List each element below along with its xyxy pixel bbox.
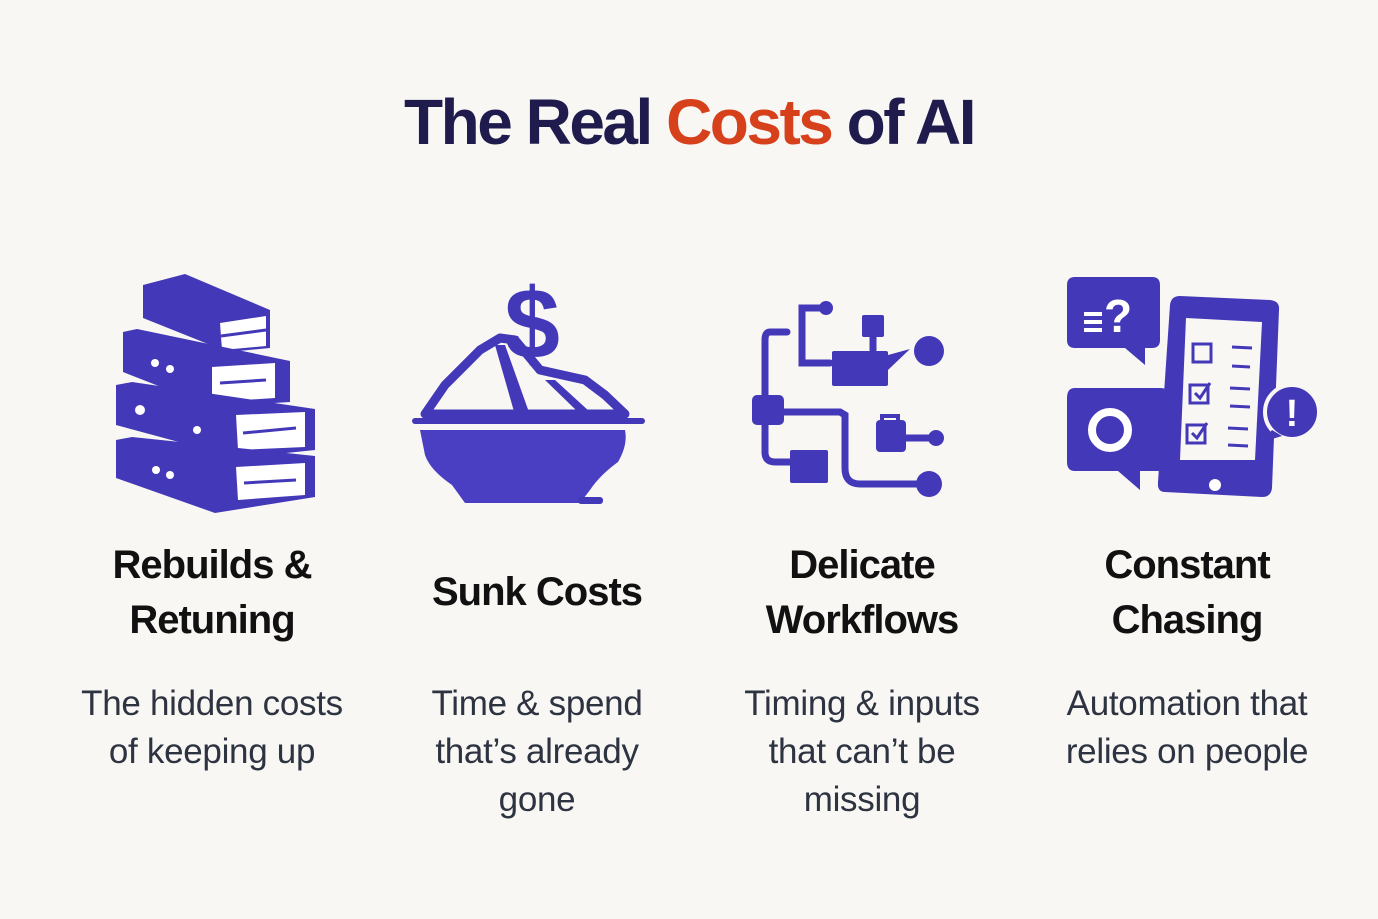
heading: rebuilds: Retuning [129,598,295,642]
text: chasing: Automation that [1067,684,1307,723]
heading: rebuilds [113,543,312,642]
column: rebuilds [81,543,343,771]
text: workflows: Timing & inputs [744,684,980,723]
heading: chasing: Constant [1104,543,1270,587]
heading: workflows [766,543,958,642]
heading: sunk costs: Sunk Costs [432,570,642,614]
text: chasing: relies on people [1066,732,1308,771]
text: rebuilds: The hidden costs [81,684,343,723]
icon: stacked servers and book [116,274,315,513]
text: sunk costs: Time & spend [431,684,643,723]
icon: workflow diagram [752,301,944,497]
title: The Real Costs of AI [404,86,974,158]
text: workflows: that can’t be [769,732,955,771]
icon: chat bubbles and checklist tablet: ? [1104,290,1132,342]
icon: iceberg with dollar: $ [504,268,560,380]
heading: rebuilds: Rebuilds & [113,543,311,587]
text: rebuilds: of keeping up [109,732,315,771]
icon: chat bubbles and checklist tablet [1067,277,1319,497]
heading: workflows: Workflows [766,598,958,642]
column: workflows [744,543,980,819]
text: sunk costs [431,684,643,819]
text: workflows [744,684,980,819]
heading: workflows: Delicate [789,543,935,587]
text: chasing [1066,684,1308,771]
heading: chasing [1104,543,1270,642]
text: sunk costs: that’s already [435,732,639,771]
text: workflows: missing [804,780,920,819]
text: rebuilds [81,684,343,771]
text: sunk costs: gone [499,780,575,819]
column: sunk costs [431,570,643,819]
column: chasing [1066,543,1308,771]
icon: chat bubbles and checklist tablet: ! [1286,393,1298,435]
heading: chasing: Chasing [1112,598,1262,642]
icon: iceberg with dollar [412,268,645,504]
